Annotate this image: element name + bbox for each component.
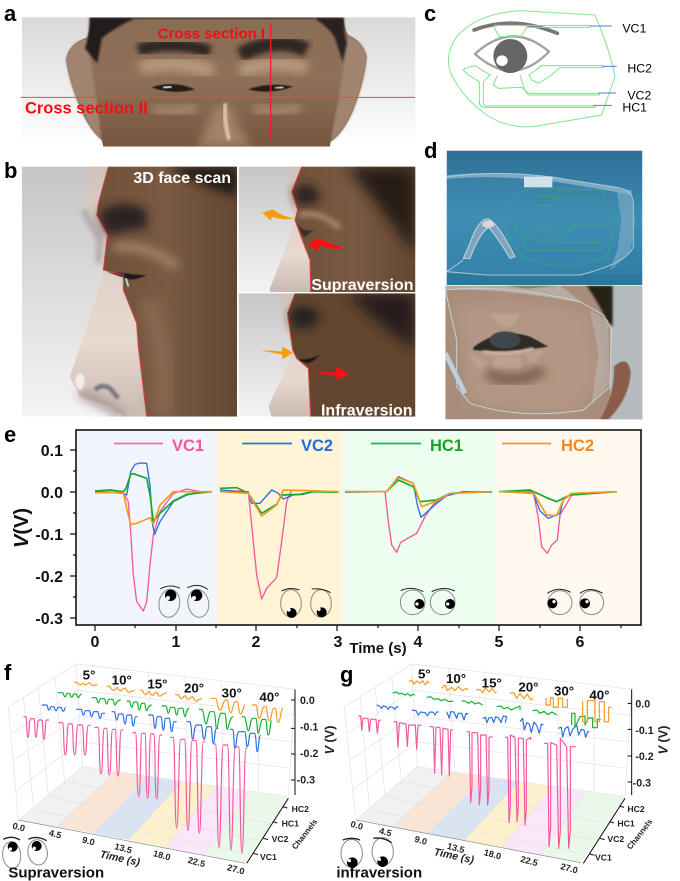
angle labels: 20° [518,679,538,694]
eye [475,36,549,73]
eyes: looking up [157,585,211,619]
time tick labels: 9.0 [413,834,428,847]
3D box and grid [8,664,295,855]
panel letter a: a [4,1,17,26]
legend: HC1 [430,437,463,455]
time tick labels: 22.5 [187,855,206,869]
label: VC2: VC2 [627,88,651,102]
time tick labels: 22.5 [519,854,539,868]
panel f: supraversion 3D chart [1,664,337,881]
label: cross section I: Cross section I [158,25,265,42]
time tick labels: 13.5 [446,841,466,855]
z axis title: V (V) [323,726,337,754]
time tick labels [11,821,246,876]
angle labels: 15° [147,676,167,691]
label: VC1: VC1 [622,22,646,36]
outline of sensor [448,11,615,127]
label: infraversion: infraversion [336,864,422,881]
angle labels: 15° [482,675,502,690]
time tick labels: 4.5 [48,828,62,840]
label: HC2: HC2 [627,62,652,76]
photo: goggles on blue background [447,151,642,285]
channels axis title: Channels [625,817,655,851]
legend: VC2 [301,437,333,455]
label: 3D face scan: 3D face scan [133,170,231,187]
eyes: looking down [281,589,331,618]
time axis title: Time (s) [433,846,475,866]
time tick labels: 27.0 [226,862,246,876]
panel b: 3D face scan side views [22,167,415,419]
y axis tick labels: 0.1 [41,443,63,460]
time tick labels [349,819,579,875]
voltage traces: segments 3 and 4 [345,477,617,553]
main side view [22,167,237,417]
channel tick labels: VC1 [595,853,612,863]
z axis title: V (V) [657,726,671,754]
channel tick labels: VC2 [607,834,624,844]
electrode traces [463,25,603,107]
panel d: sensor on goggles photos [445,151,643,419]
channel tick labels: HC1 [282,818,299,828]
infraversion view [239,293,415,417]
blue lead lines [590,26,617,105]
x axis title: Time (s) [349,640,407,657]
y axis tick labels: -0.2 [35,569,63,586]
orange HC2 traces [74,682,283,722]
z axis tick labels [297,695,318,786]
green HC1 traces [58,693,272,735]
arrow: orange up-left [262,209,294,221]
floor bands [18,767,288,863]
label: HC1: HC1 [622,101,647,115]
supraversion view [239,167,415,292]
time tick labels: 0.0 [11,821,26,833]
angle labels: 5° [418,666,431,681]
angle labels: 40° [589,687,609,702]
channel tick labels: HC2 [292,804,309,814]
channels axis title: Channels [290,817,320,851]
eyes: looking left [547,589,604,615]
orange HC2 traces [409,680,612,722]
x axis tick labels: 0 [91,634,100,651]
y axis tick labels [35,443,63,628]
z axis tick labels: -0.3 [633,777,651,789]
photo: goggles on face [445,286,643,419]
x axis tick labels: 3 [334,634,343,651]
time tick labels: 0.0 [349,819,364,832]
blue VC2 traces [377,705,589,737]
z axis tick labels [633,698,654,789]
y axis tick labels: -0.3 [35,611,63,628]
axes [18,689,295,863]
arrow: red right [310,366,349,381]
channel tick labels: VC2 [272,834,289,844]
angle labels: 20° [184,681,204,696]
axes frame and ticks [70,430,641,631]
eyes: looking right [400,588,455,615]
label: Infraversion: Infraversion [321,402,412,419]
label: Supraversion: Supraversion [311,277,414,294]
panel letter d: d [424,138,437,163]
z axis tick labels: -0.2 [300,748,318,760]
z axis tick labels: -0.1 [300,721,318,733]
panel a: front face scan [21,17,415,147]
3D box and grid [344,664,632,855]
angle labels [83,667,279,705]
eyes: supraversion icon [1,837,49,869]
x axis tick labels [91,634,585,651]
z axis tick labels: -0.1 [635,725,654,737]
panel letter f: f [4,660,12,685]
blue VC2 traces [42,705,261,752]
axes [356,689,632,863]
voltage traces: segments 1 and 2 [95,463,338,611]
legend: VC1 [172,437,204,455]
x axis tick labels: 6 [576,634,585,651]
angle labels [418,666,609,702]
arrow: orange right [261,347,293,359]
x axis tick labels: 1 [172,634,181,651]
x axis tick labels: 4 [414,634,423,651]
time tick labels: 4.5 [378,826,393,838]
angle labels: 5° [83,667,95,682]
label: cross section II: Cross section II [25,99,148,117]
z axis tick labels: -0.3 [297,774,315,786]
floor bands [356,767,625,863]
background bands [77,431,640,625]
time tick labels: 27.0 [559,861,579,875]
time tick labels: 9.0 [81,835,96,847]
time tick labels: 18.0 [152,848,172,862]
cross section lines [21,23,415,139]
time tick labels: 18.0 [483,847,502,861]
y axis tick labels: -0.1 [35,527,63,544]
legend [114,437,594,455]
panel g: infraversion 3D chart [336,664,671,881]
panel e: voltage time chart [11,430,641,657]
z axis tick labels: 0.0 [300,695,315,707]
angle labels: 10° [112,673,132,688]
channel tick labels: HC2 [627,804,645,814]
channel tick labels [260,804,309,862]
time tick labels: 13.5 [113,841,133,855]
x axis tick labels: 5 [495,634,504,651]
x axis tick labels: 2 [252,634,261,651]
z axis tick labels: -0.2 [635,751,654,763]
channel tick labels: VC1 [260,852,277,862]
label: Supraversion: Supraversion [8,864,104,881]
arrow: red left [307,238,345,252]
channel tick labels: HC1 [617,818,635,828]
legend: HC2 [561,437,594,455]
eyebrow [474,23,557,33]
panel letter g: g [340,662,353,687]
pink VC1 traces [358,716,576,848]
channel tick labels [595,804,645,863]
angle labels: 10° [446,671,466,686]
angle labels: 30° [554,683,574,698]
panel letter b: b [4,158,17,183]
panel c: electrode layout diagram [448,11,652,127]
pink VC1 traces [23,717,247,853]
panel letter e: e [4,422,16,447]
panel letter c: c [424,1,436,26]
eyes: infraversion icon [341,838,393,868]
y axis tick labels: 0.0 [41,485,63,502]
angle labels: 30° [222,685,242,700]
y axis title: V(V) [11,508,33,548]
z axis tick labels: 0.0 [635,698,650,710]
angle labels: 40° [259,690,279,705]
time axis title: Time (s) [99,849,141,869]
green HC1 traces [393,692,601,728]
